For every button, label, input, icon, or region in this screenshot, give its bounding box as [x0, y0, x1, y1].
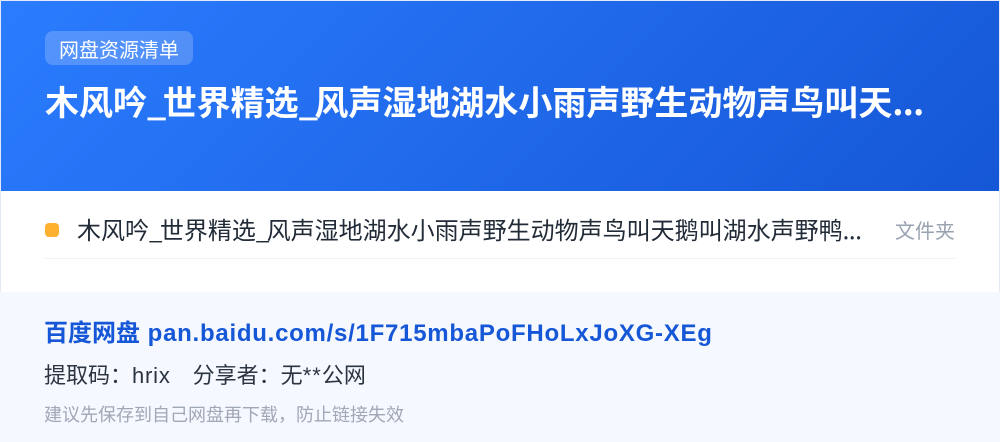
icon: folder dot	[45, 223, 59, 237]
file type: 文件夹	[895, 215, 955, 244]
share link: 百度网盘 pan.baidu.com/s/1F715mbaPoFHoLxJoXG-XEg	[44, 320, 713, 347]
panel: file row	[45, 191, 955, 259]
panel: footer	[0, 292, 1000, 442]
title: 木风吟_世界精选_风声湿地湖水小雨声野生动物声鸟叫天...	[45, 76, 923, 125]
extraction code and sharer: 提取码：hrix 分享者：无**公网	[44, 363, 366, 388]
file name: 木风吟_世界精选_风声湿地湖水小雨声野生动物声鸟叫天鹅叫湖水声野鸭...	[77, 211, 861, 246]
note: 建议先保存到自己网盘再下载，防止链接失效	[44, 405, 404, 425]
panel: header	[1, 1, 999, 191]
badge: 网盘资源清单: 网盘资源清单	[59, 34, 179, 63]
badge: 网盘资源清单	[45, 31, 193, 65]
